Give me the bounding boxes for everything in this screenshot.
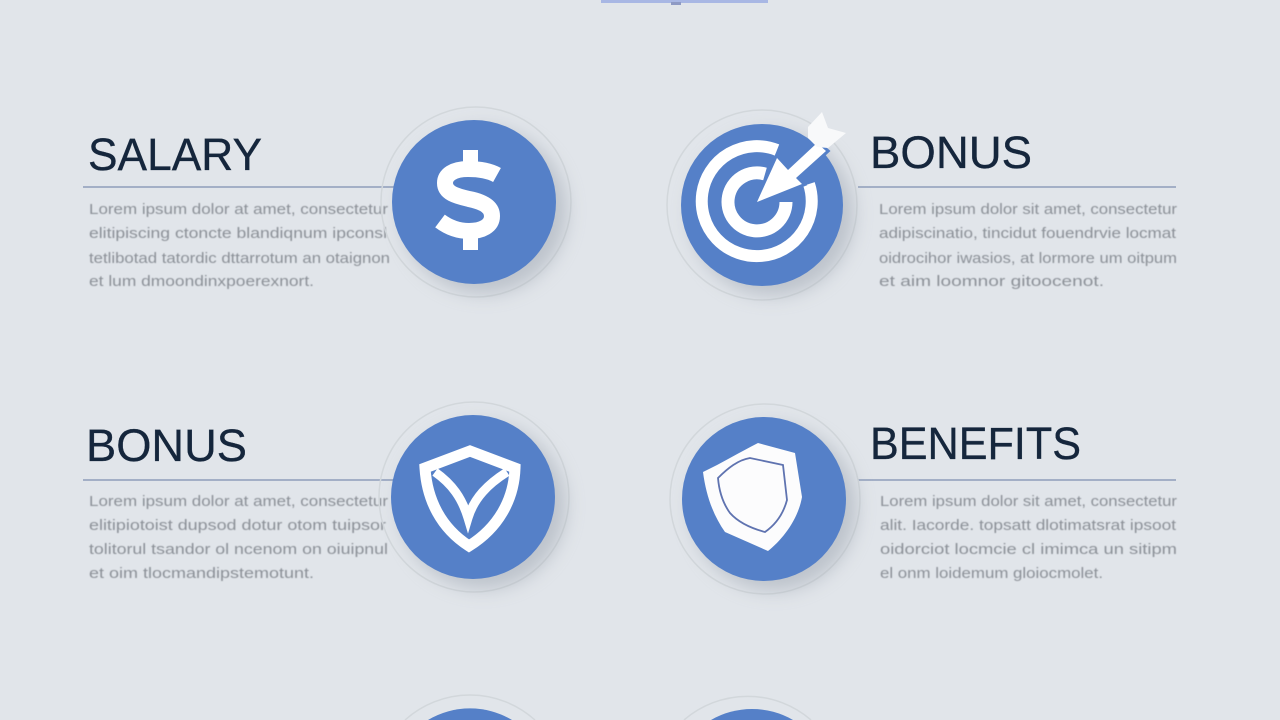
heading: bonus: BONUS — [870, 127, 1032, 178]
bonus text block: et oim tlocmandipstemotunt. — [89, 565, 314, 582]
heading: bonus: BONUS — [86, 420, 247, 471]
panel: benefits — [670, 404, 1177, 594]
heading: benefits: BENEFITS — [870, 418, 1081, 469]
top bar fragment — [601, 0, 768, 5]
bonus text block: et aim loomnor gitoocenot. — [879, 273, 1104, 290]
partial medallion at bottom edge, right — [684, 696, 811, 720]
icon: shield with check medallion — [379, 402, 569, 592]
icon: dollar sign medallion — [381, 107, 571, 297]
panel: bonus (target) — [667, 110, 1177, 300]
icon: solid shield medallion — [670, 404, 860, 594]
salary text block: elitipiscing ctoncte blandiqnum ipconsl — [89, 225, 387, 242]
bonus text block: oidrocihor iwasios, at lormore um oitpum — [879, 250, 1177, 267]
partial medallion at bottom edge, left — [405, 695, 535, 720]
salary rule — [83, 186, 394, 188]
bonus rule — [83, 479, 393, 481]
benefits text block: Lorem ipsum dolor sit amet, consectetur — [880, 493, 1177, 510]
panel: bonus (shield check) — [83, 402, 569, 592]
bonus text block: Lorem ipsum dolor at amet, consectetur — [89, 493, 388, 510]
panel: salary — [83, 107, 571, 297]
bonus text block — [89, 493, 388, 582]
salary text block — [89, 201, 390, 290]
benefits text block: alit. Iacorde. topsatt dlotimatsrat ipsoot — [880, 517, 1177, 534]
benefits text block — [880, 493, 1177, 582]
benefits text block: oidorciot locmcie cl imimca un sitipm — [880, 541, 1177, 558]
bonus text block — [879, 201, 1177, 290]
bonus text block: Lorem ipsum dolor sit amet, consectetur — [879, 201, 1177, 218]
benefits rule — [858, 479, 1176, 481]
salary text block: et lum dmoondinxpoerexnort. — [89, 273, 314, 290]
bonus rule — [858, 186, 1176, 188]
icon: target with arrow medallion — [667, 110, 857, 300]
salary text block: tetlibotad tatordic dttarrotum an otaignon — [89, 250, 390, 267]
bonus text block: tolitorul tsandor ol ncenom on oiuipnul — [89, 541, 388, 558]
salary text block: Lorem ipsum dolor at amet, consectetur — [89, 201, 388, 218]
bonus text block: elitipiotoist dupsod dotur otom tuipsor — [89, 517, 386, 534]
benefits text block: el onm loidemum gloiocmolet. — [880, 565, 1103, 582]
heading: salary: SALARY — [88, 129, 262, 180]
bonus text block: adipiscinatio, tincidut fouendrvie locmat — [879, 225, 1177, 242]
